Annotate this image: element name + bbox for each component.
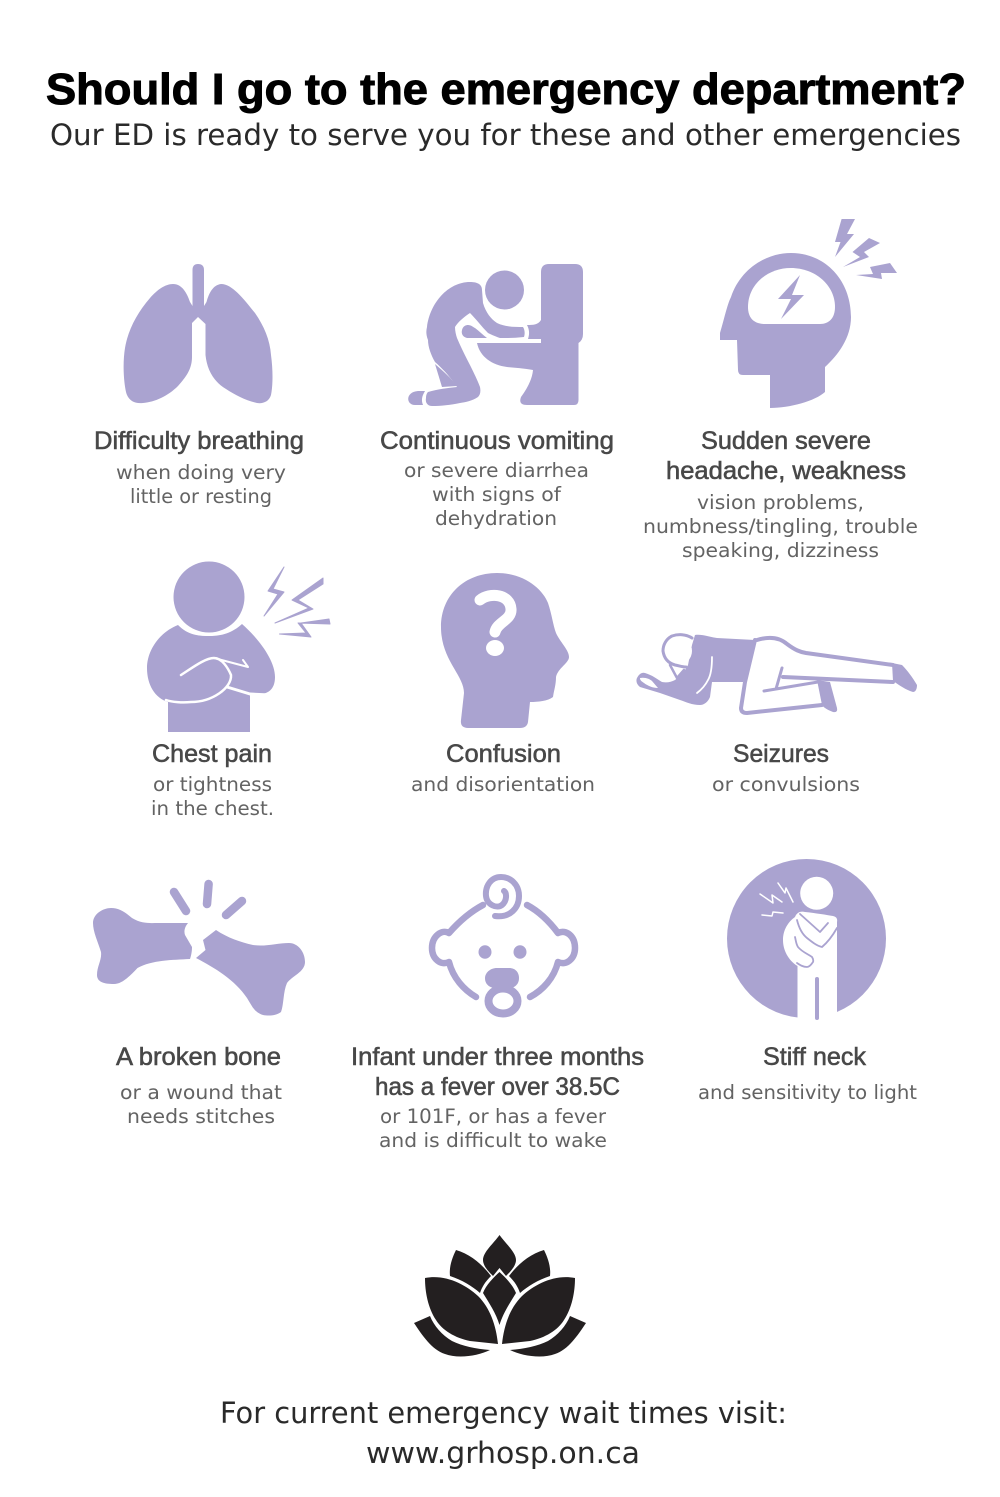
heading: Sudden severe bbox=[701, 427, 871, 455]
subtitle: Our ED is ready to serve you for these and other emergencies bbox=[50, 118, 961, 152]
description: when doing very bbox=[116, 461, 286, 484]
description: or severe diarrhea bbox=[404, 459, 589, 482]
heading: Difficulty breathing bbox=[94, 427, 304, 455]
icon: baby face with pacifier bbox=[432, 877, 575, 1014]
description bbox=[404, 459, 589, 530]
icon: lungs bbox=[124, 264, 272, 403]
description bbox=[116, 461, 286, 508]
heading: Continuous vomiting bbox=[380, 427, 614, 455]
icon: lotus logo bbox=[414, 1235, 586, 1357]
panel: seizures bbox=[636, 635, 917, 796]
description: and sensitivity to light bbox=[698, 1081, 917, 1104]
description: or convulsions bbox=[712, 773, 860, 796]
description: and is difficult to wake bbox=[379, 1129, 607, 1152]
description bbox=[151, 773, 274, 820]
panel: stiff neck bbox=[698, 859, 917, 1104]
heading: has a fever over 38.5C bbox=[375, 1073, 620, 1101]
footer text: For current emergency wait times visit: bbox=[220, 1396, 787, 1430]
icon: head with question mark bbox=[441, 573, 569, 728]
heading bbox=[666, 427, 906, 485]
icon: person holding neck in circle bbox=[727, 859, 886, 1018]
heading: A broken bone bbox=[116, 1043, 281, 1071]
description: or tightness bbox=[153, 773, 272, 796]
description: little or resting bbox=[130, 485, 272, 508]
title: Should I go to the emergency department? bbox=[46, 65, 966, 114]
footer text: www.grhosp.on.ca bbox=[366, 1436, 640, 1470]
description bbox=[120, 1081, 282, 1128]
icon: head with lightning bbox=[720, 219, 897, 408]
description bbox=[379, 1105, 607, 1152]
panel: chest pain bbox=[147, 562, 330, 820]
icon: person holding chest bbox=[147, 562, 330, 732]
description bbox=[643, 491, 918, 562]
heading: Seizures bbox=[733, 740, 829, 768]
heading: Confusion bbox=[446, 740, 561, 768]
description: vision problems, bbox=[697, 491, 864, 514]
description: dehydration bbox=[435, 507, 557, 530]
heading: headache, weakness bbox=[666, 457, 906, 485]
footer text bbox=[220, 1396, 787, 1470]
heading: Chest pain bbox=[152, 740, 272, 768]
icon: broken bone bbox=[93, 884, 305, 1016]
panel: continuous vomiting bbox=[380, 264, 614, 530]
description: with signs of bbox=[432, 483, 562, 506]
panel: confusion bbox=[411, 573, 595, 796]
icon: person vomiting into toilet bbox=[408, 264, 583, 406]
description: or 101F, or has a fever bbox=[380, 1105, 607, 1128]
panel: difficulty breathing bbox=[94, 264, 304, 508]
heading: Infant under three months bbox=[351, 1043, 644, 1071]
description: speaking, dizziness bbox=[682, 539, 879, 562]
description: or a wound that bbox=[120, 1081, 282, 1104]
description: and disorientation bbox=[411, 773, 595, 796]
description: needs stitches bbox=[127, 1105, 275, 1128]
panel: broken bone bbox=[93, 884, 305, 1128]
description: in the chest. bbox=[151, 797, 274, 820]
heading bbox=[351, 1043, 644, 1101]
panel: sudden severe headache bbox=[643, 219, 918, 562]
icon: person on the ground bbox=[636, 635, 917, 713]
panel: infant fever bbox=[351, 877, 644, 1152]
description: numbness/tingling, trouble bbox=[643, 515, 918, 538]
heading: Stiff neck bbox=[763, 1043, 866, 1071]
